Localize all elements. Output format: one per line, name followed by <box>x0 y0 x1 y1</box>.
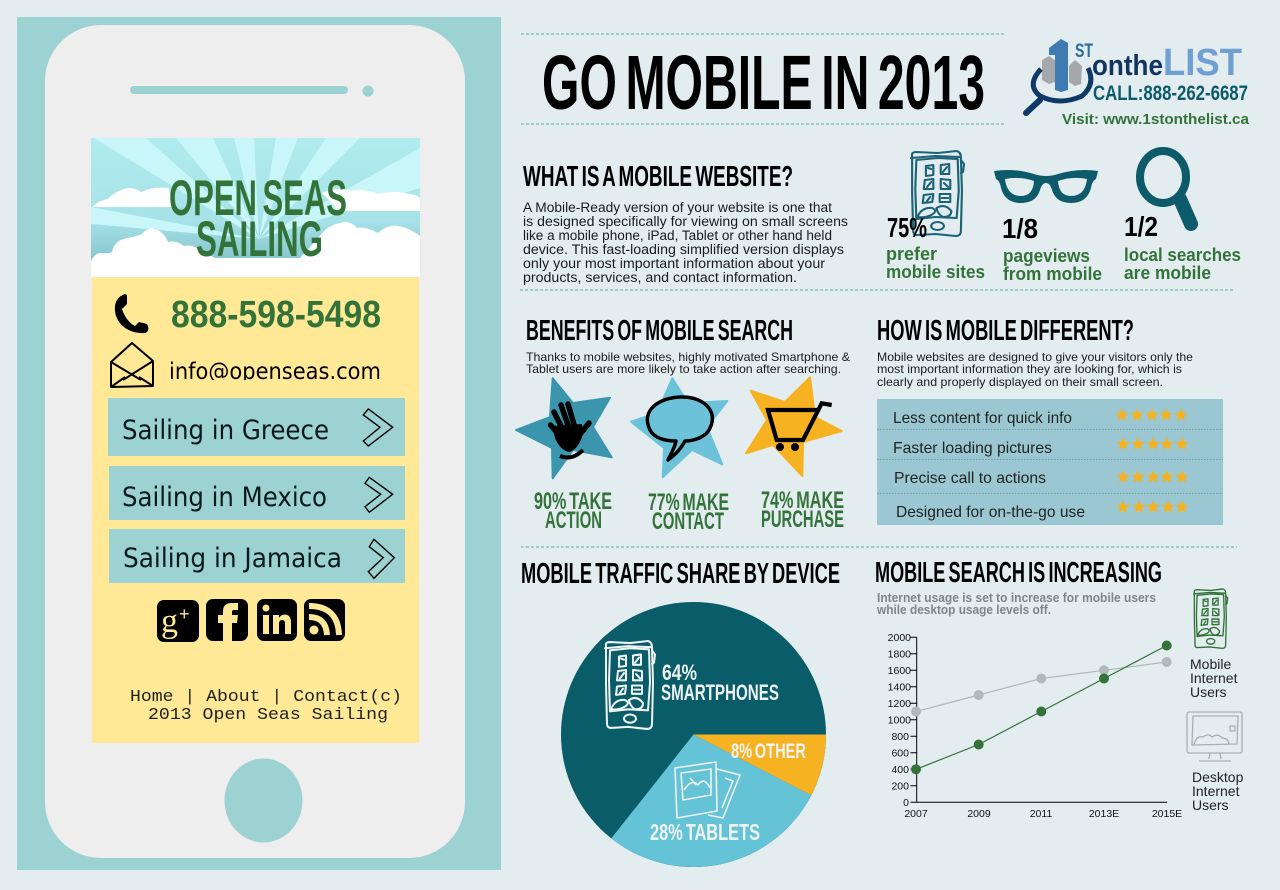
y axis labels: 600 <box>891 748 909 760</box>
phone speaker <box>130 86 348 94</box>
pie chart <box>561 602 826 867</box>
icon: envelope <box>111 343 153 387</box>
phone backdrop <box>17 17 501 870</box>
benefit: make contact <box>631 378 729 535</box>
benefit: make purchase: PURCHASE <box>761 506 844 533</box>
logo: 1st on the list <box>1026 39 1250 128</box>
title block: GO MOBILE IN 2013 <box>542 40 985 126</box>
icon: glasses <box>994 170 1098 203</box>
paragraph: products, services, and contact information. <box>523 270 797 285</box>
rating table <box>877 399 1223 525</box>
site name <box>169 170 347 267</box>
section: mobile traffic share by device <box>521 558 840 867</box>
x axis labels: 2013E <box>1089 808 1119 820</box>
series: mobile <box>911 640 1172 774</box>
button: Greece: Sailing in Greece <box>122 415 329 446</box>
icon: green phone <box>1194 589 1228 648</box>
intro text: Tablet users are more likely to take action after searching. <box>526 362 841 376</box>
row: faster loading <box>893 437 1189 457</box>
y axis labels: 0 <box>903 797 909 809</box>
y axis labels: 1200 <box>888 698 911 710</box>
sky header image <box>91 138 420 278</box>
label: smartphones: SMARTPHONES <box>661 680 779 705</box>
intro text: Mobile websites are designed to give your visitors only the <box>877 350 1193 364</box>
row: less content: Less content for quick info <box>893 410 1072 427</box>
intro text: most important information they are looking for, which is <box>877 362 1182 376</box>
star with speech bubble icon <box>631 378 727 477</box>
label: smartphones: 64% <box>662 660 697 685</box>
site name: OPEN SEAS <box>169 170 347 226</box>
logo wordmark: ST <box>1075 41 1093 62</box>
stat: 1/8: pageviews <box>1003 245 1090 266</box>
y axis labels <box>888 632 911 809</box>
heading: WHAT IS A MOBILE WEBSITE? <box>523 161 793 193</box>
paragraph: is designed specifically for viewing on small screens <box>523 214 848 229</box>
row: less content <box>893 408 1188 427</box>
heading: MOBILE TRAFFIC SHARE BY DEVICE <box>521 558 840 590</box>
icon: google plus: g <box>161 603 178 640</box>
footer links: 2013 Open Seas Sailing <box>148 705 388 724</box>
paragraph: A Mobile-Ready version of your website is one that <box>523 200 832 215</box>
intro text: clearly and properly displayed on their small screen. <box>877 375 1163 389</box>
benefit: take action: ACTION <box>545 507 602 534</box>
icon: desktop monitor <box>1187 712 1242 761</box>
series: desktop <box>911 657 1172 716</box>
stat: 75%: 75% <box>887 212 927 243</box>
yellow screen body <box>92 277 419 743</box>
stat: 1/8: from mobile <box>1003 263 1102 284</box>
icon: smartphone sketch <box>605 641 655 729</box>
icon: rss <box>304 599 345 641</box>
phone home button <box>224 758 302 842</box>
button: Mexico: Sailing in Mexico <box>122 482 327 513</box>
stat: 75%: mobile sites <box>886 261 985 282</box>
paragraph: only your most important information about your <box>523 256 826 271</box>
button: Jamaica: Sailing in Jamaica <box>123 543 342 574</box>
row: designed for on the go <box>896 500 1189 521</box>
logo url: Visit: www.1stonthelist.ca <box>1062 112 1250 128</box>
paragraph: device. This fast-loading simplified version displays <box>523 242 844 257</box>
icon: phone sketch <box>911 151 964 236</box>
site name: SAILING <box>196 211 323 267</box>
icon: linkedin <box>257 599 297 641</box>
benefit: make purchase <box>746 377 844 533</box>
icon: facebook <box>206 599 248 641</box>
icon: google plus: + <box>179 604 190 624</box>
x axis labels: 2015E <box>1152 808 1182 820</box>
benefit: make purchase: 74% MAKE <box>761 487 844 514</box>
row: faster loading: Faster loading pictures <box>893 440 1052 457</box>
button: Jamaica <box>109 529 405 583</box>
logo wordmark: LIST <box>1163 42 1242 84</box>
legend: desktop: Users <box>1192 797 1229 813</box>
email: info@openseas.com <box>169 359 381 385</box>
y axis labels: 2000 <box>888 632 911 644</box>
stat: 75% <box>886 151 985 282</box>
label: other: 8% OTHER <box>731 739 806 763</box>
section: what is a mobile website <box>523 161 848 285</box>
x axis labels: 2009 <box>967 808 991 820</box>
x axis labels: 2011 <box>1030 808 1052 820</box>
heading: BENEFITS OF MOBILE SEARCH <box>526 315 793 347</box>
intro text <box>526 350 850 376</box>
benefit: make contact: 77% MAKE <box>648 489 729 516</box>
intro text: Thanks to mobile websites, highly motivated Smartphone & <box>526 350 850 364</box>
subheading: Internet usage is set to increase for mobile users <box>877 591 1156 605</box>
x axis labels <box>904 808 1182 820</box>
footer links: Home | About | Contact(c) <box>130 687 402 706</box>
star with hand icon <box>516 378 612 478</box>
legend: mobile: Users <box>1190 684 1227 700</box>
legend: desktop: Internet <box>1192 783 1240 799</box>
paragraph: like a mobile phone, iPad, Tablet or other hand held <box>523 228 832 243</box>
section: mobile search is increasing <box>875 557 1244 820</box>
y axis labels: 400 <box>891 764 909 776</box>
stat: 1/2: are mobile <box>1124 262 1211 283</box>
stat: 1/2: local searches <box>1124 244 1241 265</box>
stat: 1/8: 1/8 <box>1002 213 1038 244</box>
heading: HOW IS MOBILE DIFFERENT? <box>877 315 1134 347</box>
stat: 1/2 <box>1124 151 1241 283</box>
label: tablets: 28% TABLETS <box>650 819 760 845</box>
panel: phone mockup <box>17 17 501 870</box>
subheading <box>876 591 1156 617</box>
section: how is mobile different <box>877 315 1223 525</box>
row: precise call to actions <box>894 470 1189 487</box>
stat: 1/2: 1/2 <box>1124 211 1158 242</box>
legend: desktop <box>1187 712 1244 813</box>
subheading: while desktop usage levels off. <box>876 603 1051 617</box>
y axis labels: 800 <box>891 731 909 743</box>
icon: magnifier with buildings <box>1026 39 1091 113</box>
legend: desktop: Desktop <box>1192 769 1244 785</box>
legend: mobile: Mobile <box>1190 656 1231 672</box>
y axis labels: 1400 <box>888 682 911 694</box>
logo wordmark <box>1075 41 1242 84</box>
star with cart icon <box>746 377 842 476</box>
benefit: take action <box>516 378 612 534</box>
paragraph <box>523 200 848 285</box>
button: Greece <box>108 398 405 456</box>
phone body <box>45 25 465 858</box>
y axis labels: 1600 <box>888 665 911 677</box>
x axis labels: 2007 <box>904 808 928 820</box>
y axis labels: 1000 <box>888 714 911 726</box>
icon: magnifying glass <box>1140 151 1191 224</box>
legend: mobile <box>1190 589 1238 700</box>
legend: mobile: Internet <box>1190 670 1238 686</box>
icon: telephone <box>115 294 148 333</box>
intro text <box>877 350 1193 389</box>
icon: google plus <box>157 600 199 642</box>
benefit: take action: 90% TAKE <box>534 488 612 515</box>
y axis labels: 1800 <box>888 648 911 660</box>
button: Mexico <box>109 466 405 520</box>
label: smartphones <box>661 660 779 705</box>
row: designed for on the go: Designed for on-the-go use <box>896 504 1085 521</box>
stat: 75%: prefer <box>886 243 937 264</box>
axes <box>910 637 1167 802</box>
line chart <box>888 632 1182 820</box>
footer links <box>130 687 402 724</box>
row: precise call to actions: Precise call to actions <box>894 470 1046 487</box>
logo wordmark: onthe <box>1092 50 1163 82</box>
y axis labels: 200 <box>891 780 909 792</box>
benefit: make contact: CONTACT <box>652 508 724 535</box>
phone camera dot <box>362 86 374 96</box>
icon: tablet photos sketch <box>675 762 740 818</box>
phone number: 888-598-5498 <box>171 294 381 336</box>
stat: 1/8 <box>994 170 1102 284</box>
section: benefits of mobile search <box>516 315 850 535</box>
